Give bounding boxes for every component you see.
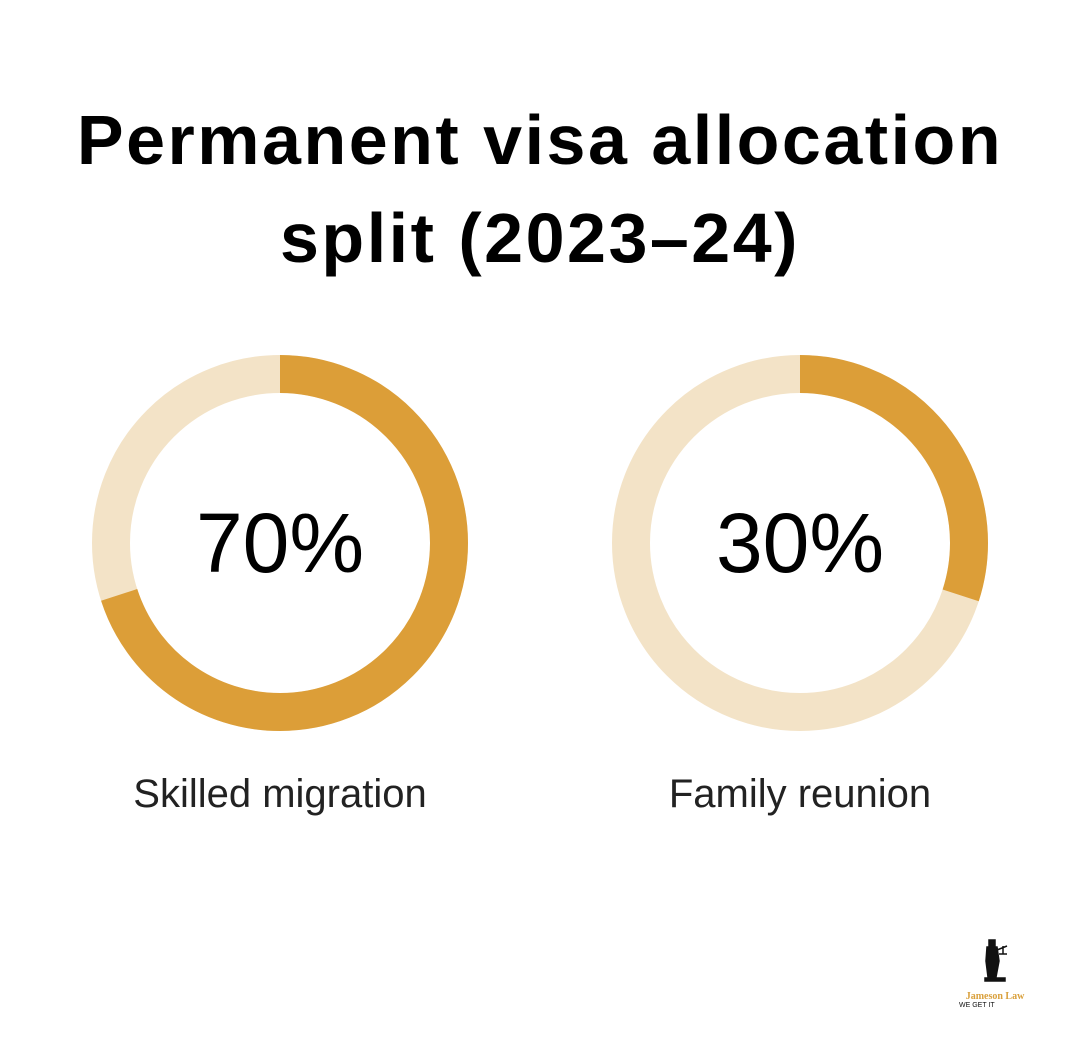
label: skilled migration: Skilled migration — [133, 772, 427, 816]
title: split (2023–24) — [280, 199, 800, 277]
title — [77, 101, 1003, 277]
logo: WE GET IT — [959, 1002, 995, 1009]
label: family reunion: Family reunion — [669, 772, 931, 816]
donut: skilled migration 70%: 70% — [196, 496, 364, 590]
donut: family reunion 30%: 30% — [716, 496, 884, 590]
logo: Jameson Law — [966, 991, 1024, 1002]
title: Permanent visa allocation — [77, 101, 1003, 179]
logo — [959, 939, 1024, 1009]
